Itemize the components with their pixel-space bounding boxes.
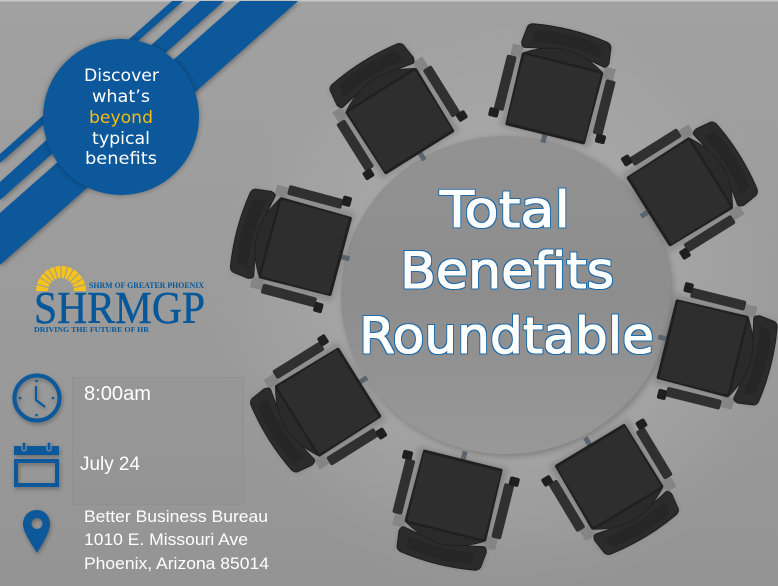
callout text: what’s — [92, 87, 150, 106]
chair 3 — [609, 104, 771, 267]
icon: clock — [14, 376, 60, 420]
callout circle — [43, 39, 199, 195]
title: Roundtable — [359, 307, 654, 365]
title: Benefits — [400, 242, 614, 300]
logo sun — [36, 264, 87, 291]
details box — [72, 378, 244, 504]
logo — [34, 264, 205, 334]
chair 6 — [379, 437, 523, 578]
round table — [341, 136, 674, 457]
callout text — [84, 66, 159, 168]
chair 1 — [312, 30, 475, 192]
time text: 8:00am — [84, 383, 151, 405]
callout text: Discover — [84, 66, 159, 85]
title — [359, 181, 654, 365]
logo text: SHRMGP — [34, 282, 205, 333]
logo text: DRIVING THE FUTURE OF HR — [34, 325, 150, 334]
chair 5 — [534, 407, 696, 568]
address text: Phoenix, Arizona 85014 — [84, 554, 269, 573]
chair 4 — [644, 279, 778, 423]
callout text: beyond — [89, 108, 153, 127]
icon: calendar — [14, 442, 59, 487]
title: Total — [439, 181, 570, 239]
address text: Better Business Bureau — [84, 507, 268, 526]
callout text: typical — [92, 129, 150, 148]
chair 8 — [222, 171, 365, 317]
date text: July 24 — [80, 454, 140, 475]
blue diagonal stripes — [0, 1, 298, 265]
callout text: benefits — [85, 149, 157, 168]
chair 7 — [237, 327, 399, 490]
address text — [84, 507, 269, 573]
address text: 1010 E. Missouri Ave — [84, 530, 248, 549]
icon: location pin — [23, 510, 50, 553]
chair 2 — [485, 16, 629, 157]
logo text: SHRM OF GREATER PHOENIX — [89, 281, 204, 290]
